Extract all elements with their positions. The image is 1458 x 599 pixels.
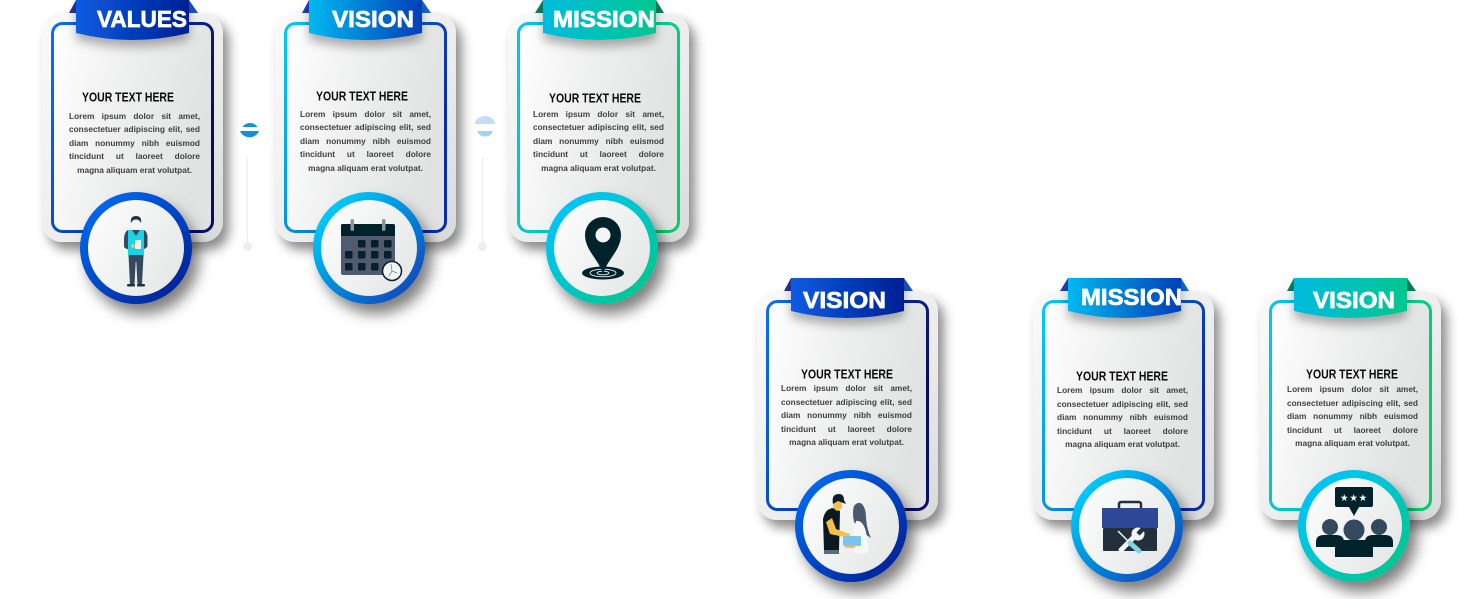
badge circle (1075, 474, 1179, 578)
body text: diam nonummy nibh euismod (300, 136, 431, 146)
body text: Lorem ipsum dolor sit amet, (300, 109, 431, 119)
ribbon (1287, 278, 1416, 318)
body text: magna aliquam erat volutpat. (77, 165, 192, 175)
icon: location pin (582, 217, 624, 280)
ribbon (302, 0, 431, 40)
body text: Lorem ipsum dolor sit amet, (781, 383, 912, 393)
connector: first divider (240, 123, 259, 251)
ribbon: MISSION (1081, 284, 1182, 310)
icon: team with rating bubble: ★★★ (1340, 493, 1368, 504)
badge circle (84, 196, 188, 300)
panel: mission card (508, 0, 689, 300)
body text: diam nonummy nibh euismod (69, 138, 200, 148)
card border panel (1270, 302, 1430, 510)
body text: consectetuer adipiscing elit, sed (300, 122, 431, 132)
body text: tincidunt ut laoreet dolore (781, 424, 912, 434)
card base (42, 13, 223, 242)
ribbon: VISION (332, 6, 414, 32)
body text: tincidunt ut laoreet dolore (533, 149, 664, 159)
card base (508, 13, 689, 242)
ribbon (535, 0, 664, 40)
ribbon (1060, 278, 1189, 318)
card base (1033, 291, 1214, 520)
body text (781, 382, 916, 454)
icon: delivery person and customer (823, 494, 871, 554)
ribbon: VISION (803, 287, 886, 313)
body text: magna aliquam erat volutpat. (1065, 439, 1180, 449)
heading: YOUR TEXT HERE (549, 92, 641, 106)
body text: tincidunt ut laoreet dolore (69, 151, 200, 161)
body text: consectetuer adipiscing elit, sed (1057, 399, 1188, 409)
icon: calendar with clock (341, 219, 402, 280)
body text: diam nonummy nibh euismod (1057, 412, 1188, 422)
body text (533, 108, 668, 180)
body text: diam nonummy nibh euismod (1287, 411, 1418, 421)
heading: YOUR TEXT HERE (801, 368, 893, 382)
panel: mission card tools (1033, 278, 1214, 578)
body text: diam nonummy nibh euismod (533, 136, 664, 146)
body text: consectetuer adipiscing elit, sed (69, 124, 200, 134)
body text: tincidunt ut laoreet dolore (1287, 425, 1418, 435)
body text: consectetuer adipiscing elit, sed (533, 122, 664, 132)
card border panel (52, 24, 212, 232)
card base (1260, 291, 1441, 520)
body text (1287, 383, 1422, 455)
card base (275, 13, 456, 242)
ribbon (784, 278, 913, 318)
icon: person with clipboard (124, 216, 148, 286)
body text: magna aliquam erat volutpat. (308, 163, 423, 173)
badge circle (317, 196, 421, 300)
ribbon: VALUES (97, 6, 187, 32)
card border panel (518, 24, 678, 232)
card base (757, 291, 938, 520)
body text: magna aliquam erat volutpat. (541, 163, 656, 173)
body text: diam nonummy nibh euismod (781, 410, 912, 420)
body text (69, 110, 204, 182)
body text: Lorem ipsum dolor sit amet, (533, 109, 664, 119)
body text: Lorem ipsum dolor sit amet, (1057, 385, 1188, 395)
body text: consectetuer adipiscing elit, sed (781, 397, 912, 407)
ribbon: VISION (1313, 287, 1395, 313)
body text: Lorem ipsum dolor sit amet, (69, 111, 200, 121)
ribbon (69, 0, 198, 40)
badge circle (1302, 474, 1406, 578)
icon: toolbox (1102, 502, 1158, 551)
heading: YOUR TEXT HERE (316, 90, 408, 104)
body text: magna aliquam erat volutpat. (789, 437, 904, 447)
body text: magna aliquam erat volutpat. (1295, 438, 1410, 448)
badge circle (550, 196, 654, 300)
body text: tincidunt ut laoreet dolore (300, 149, 431, 159)
panel: vision card (275, 0, 456, 300)
connector: second divider (475, 116, 495, 251)
heading: YOUR TEXT HERE (1076, 370, 1168, 384)
panel: vision card delivery (757, 278, 938, 578)
card border panel (1044, 302, 1204, 510)
panel: values card (42, 0, 223, 300)
heading: YOUR TEXT HERE (82, 90, 174, 104)
panel: vision card team (1260, 278, 1441, 578)
card border panel (286, 24, 446, 232)
badge circle (799, 474, 903, 578)
heading: YOUR TEXT HERE (1306, 368, 1398, 382)
body text (1057, 384, 1192, 456)
body text: tincidunt ut laoreet dolore (1057, 426, 1188, 436)
ribbon: MISSION (553, 6, 655, 32)
card border panel (768, 302, 928, 510)
body text (300, 108, 435, 180)
body text: Lorem ipsum dolor sit amet, (1287, 384, 1418, 394)
body text: consectetuer adipiscing elit, sed (1287, 398, 1418, 408)
